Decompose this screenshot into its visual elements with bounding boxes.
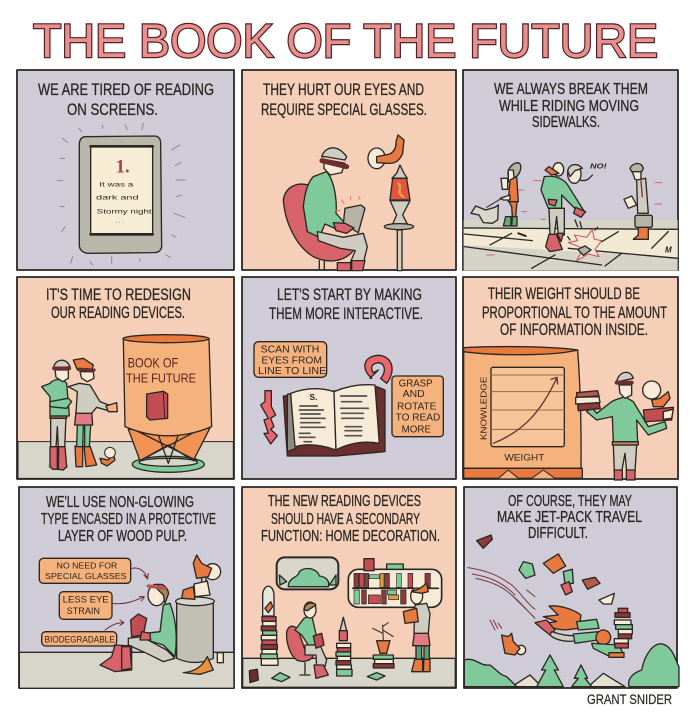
callouts with arrows: LESS EYE	[63, 595, 109, 605]
panel: jet-pack travel	[464, 487, 679, 688]
scene: moving sidewalk with dropped reader: NO!	[590, 161, 607, 170]
callouts with arrows: STRAIN	[67, 606, 100, 616]
caption: panel 3: WHILE RIDING MOVING	[499, 98, 639, 115]
caption: panel 4: OUR READING DEVICES.	[51, 303, 185, 322]
panel: redesign our reading devices	[17, 277, 234, 479]
chart: knowledge vs weight on device: KNOWLEDGE	[479, 376, 489, 440]
caption: panel 3	[494, 81, 648, 131]
scene: decorated room with books	[243, 557, 455, 687]
caption: panel 9	[497, 493, 642, 542]
scene: falling jet-pack rider and flying books	[464, 535, 679, 687]
icon: open book	[283, 385, 385, 456]
arrows: rotate and scroll	[261, 355, 392, 444]
caption: panel 1: ON SCREENS.	[67, 100, 158, 119]
caption: panel 8: FUNCTION: HOME DECORATION.	[261, 528, 440, 545]
caption: panel 8: SHOULD HAVE A SECONDARY	[271, 511, 420, 528]
caption: panel 5: THEM MORE INTERACTIVE.	[269, 304, 423, 323]
callout: grasp and rotate: GRASP	[399, 379, 433, 390]
panel: more interactive	[242, 277, 456, 479]
landscape with trees	[464, 644, 679, 687]
callout: grasp and rotate: TO READ	[396, 412, 440, 423]
window with tree	[277, 557, 338, 589]
callout: grasp and rotate	[392, 376, 443, 437]
caption: panel 3: WE ALWAYS BREAK THEM	[494, 81, 648, 98]
plant in vase on books	[373, 623, 394, 668]
caption: panel 6	[482, 284, 667, 339]
figure: person weighing books	[576, 372, 673, 480]
panel: home decoration	[242, 487, 456, 688]
scene: couple beside the book of the future machine: THE FUTURE	[126, 371, 196, 385]
caption: panel 1: WE ARE TIRED OF READING	[38, 80, 214, 99]
caption: panel 7	[41, 494, 216, 545]
callouts with arrows: SPECIAL GLASSES	[45, 571, 127, 581]
callout: scan with eyes: SCAN WITH	[261, 344, 319, 355]
floating bookshelf	[348, 559, 442, 607]
caption: panel 7: WE'LL USE NON-GLOWING	[46, 494, 194, 511]
caption: panel 2	[261, 80, 427, 119]
panel: tired of reading on screens	[17, 70, 234, 270]
speed lines	[468, 568, 535, 630]
flying person with jet pack	[535, 606, 632, 657]
icon: glowing e-reader: dark and	[96, 194, 139, 201]
caption: panel 8: THE NEW READING DEVICES	[268, 493, 421, 510]
credit: Grant Snider: GRANT SNIDER	[587, 692, 672, 707]
person reading in chair	[287, 602, 328, 678]
falling bird	[502, 633, 526, 655]
callouts with arrows	[19, 558, 234, 688]
callout: grasp and rotate: AND	[403, 389, 425, 400]
caption: panel 2: THEY HURT OUR EYES AND	[263, 80, 424, 99]
caption: panel 9: MAKE JET-PACK TRAVEL	[497, 509, 642, 526]
figure: person reading by trash can	[100, 555, 223, 674]
icon: glowing e-reader: 1.	[116, 156, 130, 177]
callout: grasp and rotate: ROTATE	[397, 402, 437, 413]
chart: knowledge vs weight on device: WEIGHT	[504, 453, 545, 463]
book stack with bird jar	[261, 586, 278, 665]
scene: moving sidewalk with dropped reader: M	[665, 246, 672, 255]
callout: scan with eyes: LINE TO LINE	[258, 366, 327, 377]
caption: panel 1	[38, 80, 214, 119]
caption: panel 4	[46, 285, 191, 322]
icon: glowing e-reader: It was a	[99, 182, 134, 189]
caption: panel 2: REQUIRE SPECIAL GLASSES.	[261, 100, 427, 119]
icon: glowing e-reader: . . .	[115, 218, 124, 225]
caption: panel 9: DIFFICULT.	[528, 525, 588, 542]
panel: weight proportional to information	[463, 277, 678, 480]
icon: open book: S.	[309, 392, 318, 402]
scene: moving sidewalk with dropped reader	[464, 161, 678, 271]
icon: glowing e-reader	[57, 123, 185, 265]
caption: panel 7: LAYER OF WOOD PULP.	[58, 528, 187, 545]
caption: panel 8	[261, 493, 440, 545]
panel: break on moving sidewalks	[463, 70, 678, 271]
figure: reader with visor in chair beside lava lamp	[283, 135, 414, 271]
panel: non-glowing type wood pulp	[19, 487, 234, 688]
callout: grasp and rotate: MORE	[402, 424, 432, 435]
callout: scan with eyes: EYES FROM	[261, 355, 322, 366]
caption: panel 5: LET'S START BY MAKING	[277, 285, 422, 304]
caption: panel 9: OF COURSE, THEY MAY	[508, 493, 632, 510]
woman placing book on shelf	[403, 583, 430, 672]
scene: couple beside the book of the future machine: BOOK OF	[128, 354, 178, 370]
panel: hurt our eyes	[242, 70, 456, 271]
callout: scan with eyes	[254, 342, 327, 377]
callouts with arrows: BIODEGRADABLE	[45, 635, 115, 645]
chart: knowledge vs weight on device	[464, 347, 582, 478]
scene: couple beside the book of the future machine	[18, 335, 233, 478]
callouts with arrows: NO NEED FOR	[57, 561, 117, 571]
caption: panel 4: IT'S TIME TO REDESIGN	[46, 285, 191, 304]
flying books	[477, 535, 614, 604]
icon: glowing e-reader: Stormy night	[97, 208, 152, 215]
books on floor	[249, 669, 385, 683]
caption: panel 3: SIDEWALKS.	[532, 114, 600, 131]
caption: panel 5	[269, 285, 423, 323]
stack with lava lamp	[336, 617, 352, 676]
caption: panel 7: TYPE ENCASED IN A PROTECTIVE	[41, 511, 216, 528]
title: THE BOOK OF THE FUTURE	[33, 14, 658, 67]
